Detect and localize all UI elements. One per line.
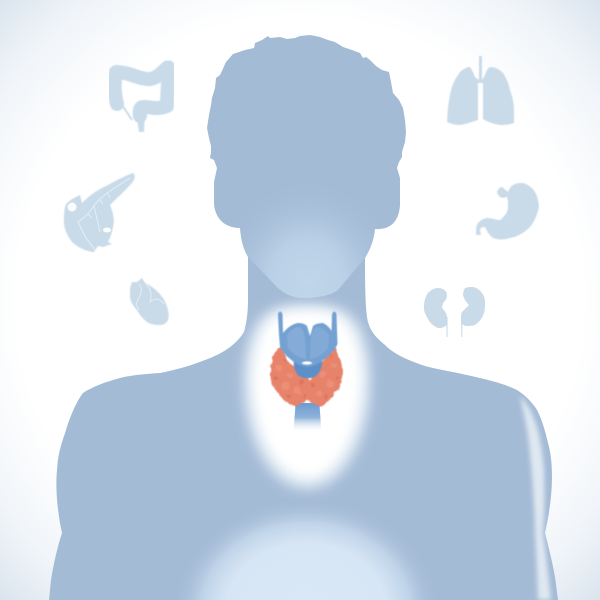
trachea: [294, 403, 321, 432]
hair and head: [207, 35, 406, 298]
left and right thyroid lobes: [271, 346, 343, 406]
pancreatic duct: [78, 178, 130, 250]
face highlight: [246, 216, 368, 298]
icon: kidneys: [424, 287, 485, 337]
thyroid illustration: [271, 312, 343, 432]
thyroid cartilage: [278, 312, 338, 378]
icon: colon: [115, 67, 168, 132]
icon: heart: [130, 278, 169, 325]
body and neck: [49, 255, 558, 600]
chest glow: [170, 496, 442, 600]
left kidney: [424, 288, 448, 337]
icon: pancreas: [64, 173, 135, 252]
icon: lungs: [447, 56, 514, 125]
right kidney: [461, 287, 485, 337]
lobe texture: [276, 363, 337, 396]
human silhouette: [49, 35, 558, 600]
icon: stomach: [476, 183, 539, 240]
neck glow: [243, 304, 371, 490]
arm highlight: [520, 396, 551, 600]
